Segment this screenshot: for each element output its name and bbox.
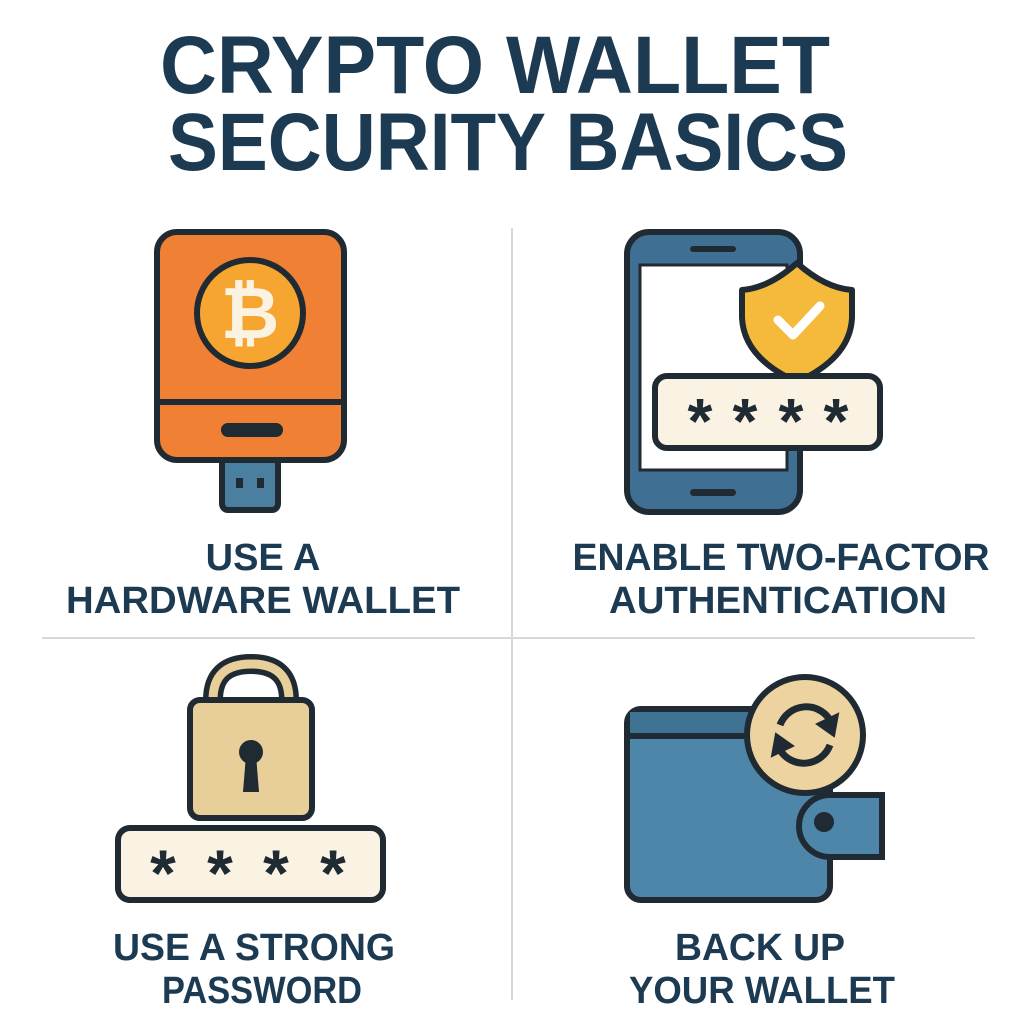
text: use a hardware wallet (66, 537, 460, 622)
text: strong password (113, 927, 395, 1012)
password box: * (320, 836, 346, 910)
title: CRYPTO WALLET (160, 20, 830, 111)
text: enable 2fa: AUTHENTICATION (609, 580, 947, 622)
password box (118, 828, 383, 910)
password box: * (824, 385, 849, 457)
password box: * (150, 836, 176, 910)
text: strong password: USE A STRONG (113, 927, 395, 969)
icon: shield (742, 263, 852, 382)
panel: back up (627, 677, 895, 1012)
icon: phone (627, 232, 800, 512)
icon: hardware wallet (157, 232, 344, 510)
password box (655, 376, 880, 457)
icon: hardware wallet: ₿ (221, 274, 279, 354)
text: back up wallet (629, 927, 895, 1012)
title (160, 20, 848, 188)
password box: * (733, 385, 758, 457)
panel: hardware wallet (66, 232, 460, 622)
password box: * (263, 836, 289, 910)
text: back up wallet: YOUR WALLET (629, 970, 895, 1012)
panel: two-factor (572, 232, 990, 622)
password box: * (779, 385, 804, 457)
text: use a hardware wallet: USE A (206, 537, 320, 579)
panel: strong password (113, 664, 395, 1012)
text: strong password: PASSWORD (162, 970, 362, 1012)
text: back up wallet: BACK UP (675, 927, 845, 969)
title: SECURITY BASICS (168, 97, 848, 188)
text: enable 2fa: ENABLE TWO-FACTOR (572, 537, 990, 579)
text: enable 2fa (572, 537, 990, 622)
text: use a hardware wallet: HARDWARE WALLET (66, 580, 460, 622)
password box: * (688, 385, 713, 457)
password box: * (207, 836, 233, 910)
icon: lock (190, 664, 312, 818)
icon: wallet (627, 677, 882, 900)
